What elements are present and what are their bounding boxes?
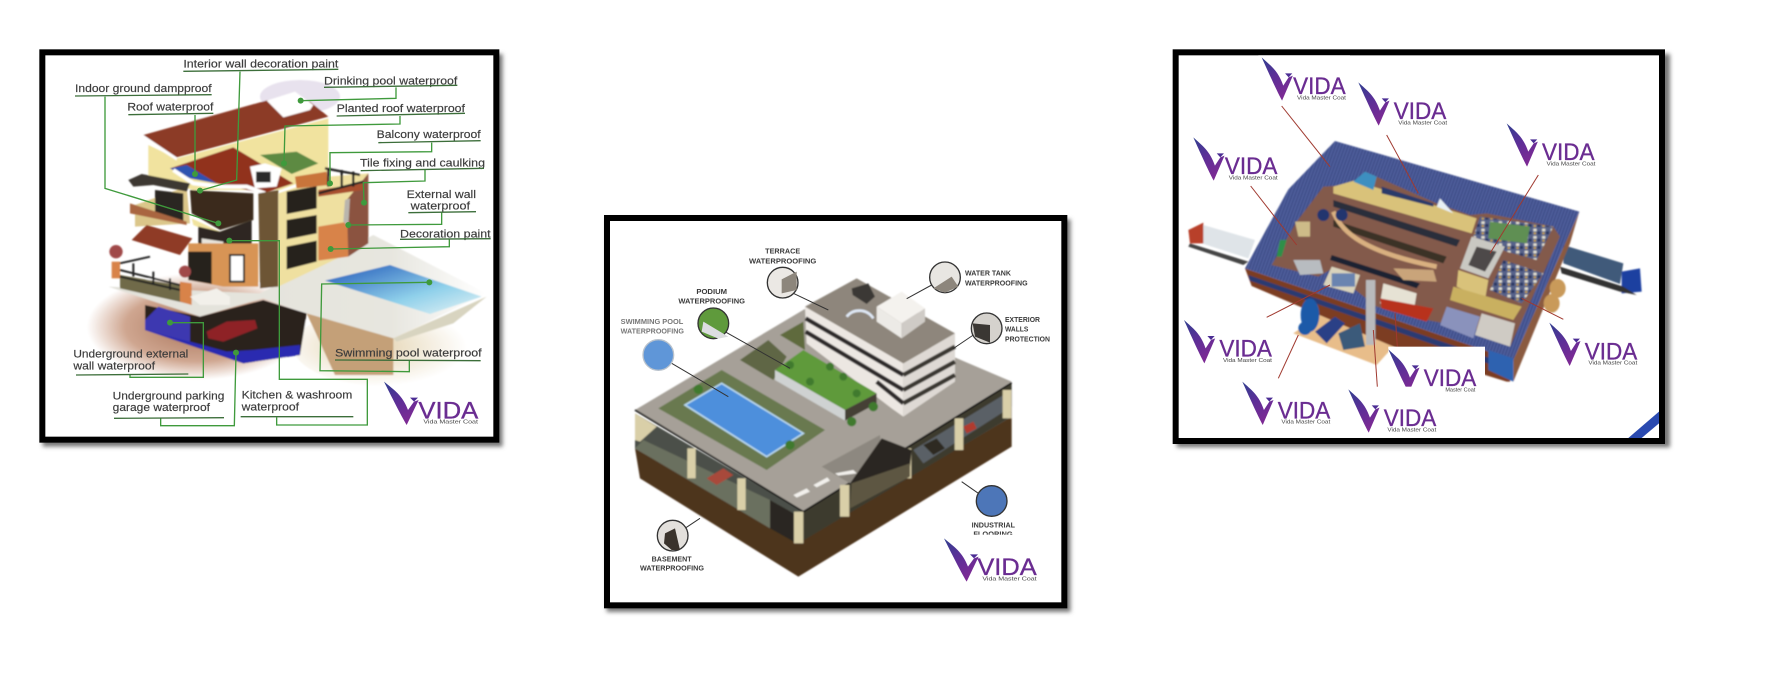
callout labels: Kitchen & washroom [242,390,352,402]
callout labels: BASEMENT [652,554,692,563]
callout labels: Indoor ground dampproof [75,83,213,95]
callout labels: INDUSTRIAL [972,521,1015,530]
detail circles with leader lines [643,262,1007,551]
callout labels: Swimming pool waterproof [335,348,483,360]
panel: residential house waterproofing [42,52,503,447]
panel frame [1176,52,1670,447]
logo 9: Vida Master Coat [1387,427,1437,433]
callout labels: PODIUM [696,287,727,296]
logo 8, partly overlapped: VIDA [1424,364,1477,391]
callout labels: TERRACE [765,247,800,256]
illustration: factory cutaway [1188,141,1642,382]
panel: factory cutaway with logos [1176,52,1670,447]
callout labels: wall waterproof [72,360,156,372]
logo 3: Vida Master Coat [1229,175,1278,181]
logo 4: VIDA [1542,138,1595,165]
logo 7: VIDA [1278,396,1331,424]
logo 2 [1358,82,1448,126]
callout labels: WATERPROOFING [678,297,745,306]
callout labels [72,58,492,418]
callout labels: WATERPROOFING [621,327,684,336]
patch clipping logo 8 [1388,387,1445,394]
logo 5: Vida Master Coat [1223,358,1272,364]
callout labels: Roof waterproof [127,101,214,113]
callout labels: SWIMMING POOL [621,317,684,326]
logo 5: VIDA [1219,335,1273,362]
logo: Vida Master Coat: VIDA [418,397,478,424]
callout labels: Interior wall decoration paint [183,58,339,70]
logo 4: Vida Master Coat [1547,161,1596,167]
logo 6: VIDA [1585,337,1638,365]
logo: Vida Master Coat [384,382,479,425]
callout labels: WATERPROOFING [965,279,1028,288]
callout labels: Tile fixing and caulking [360,158,485,170]
corner accent [1628,412,1659,438]
logo 2: Vida Master Coat [1398,120,1448,126]
logo backing patches [1258,55,1647,387]
logo 8, partly overlapped: Master Coat [1445,387,1476,393]
logo 6: Vida Master Coat [1588,360,1638,367]
callout labels: waterproof [241,402,300,414]
illustration: cutaway house [87,80,487,387]
logo 1: Vida Master Coat [1297,95,1347,101]
panel: commercial building waterproofing [607,218,1071,612]
callout labels: External wall [407,189,476,201]
logo 8, partly overlapped [1388,349,1477,393]
logo 1: VIDA [1293,72,1346,99]
callout labels: EXTERIOR [1005,315,1040,324]
callout labels: Drinking pool waterproof [324,75,458,87]
red leader lines [1251,106,1563,387]
logo 3 [1193,137,1278,181]
callout labels: PROTECTION [1005,334,1050,343]
logo: Vida Master Coat: Vida Master Coat [423,419,479,425]
callout labels: WATERPROOFING [749,256,816,265]
callout labels: Decoration paint [400,228,492,240]
logo 1 [1262,57,1347,101]
logo 9 [1348,389,1437,433]
mask over clipped label [967,535,1020,539]
callout labels: FLOORING [973,530,1013,539]
logo 9: VIDA [1384,404,1437,431]
callout labels: garage waterproof [113,402,211,414]
logo 5 [1184,320,1273,364]
callout labels: Underground external [73,348,188,360]
panel frame [607,218,1071,612]
callout labels: WALLS [1005,325,1028,334]
logo 6 [1549,323,1638,367]
callout labels: Balcony waterproof [377,129,482,141]
logo 7: Vida Master Coat [1281,419,1331,426]
logo 3: VIDA [1225,152,1278,179]
logo: Vida Master Coat [944,538,1037,582]
logo: Vida Master Coat: VIDA [977,554,1037,581]
callout labels [621,247,1050,573]
callout labels: Planted roof waterproof [337,103,466,115]
logo 7 [1242,382,1331,426]
callout labels: Underground parking [113,390,224,402]
panel frame [42,52,503,447]
illustration: isometric building and podium [635,278,1012,577]
callout labels: waterproof [410,200,471,212]
logo: Vida Master Coat: Vida Master Coat [982,576,1037,582]
callout labels: WATERPROOFING [640,564,704,573]
logo 4 [1507,123,1596,167]
callout labels: WATER TANK [965,269,1011,278]
leader lines [105,72,449,426]
logo 2: VIDA [1394,97,1447,124]
